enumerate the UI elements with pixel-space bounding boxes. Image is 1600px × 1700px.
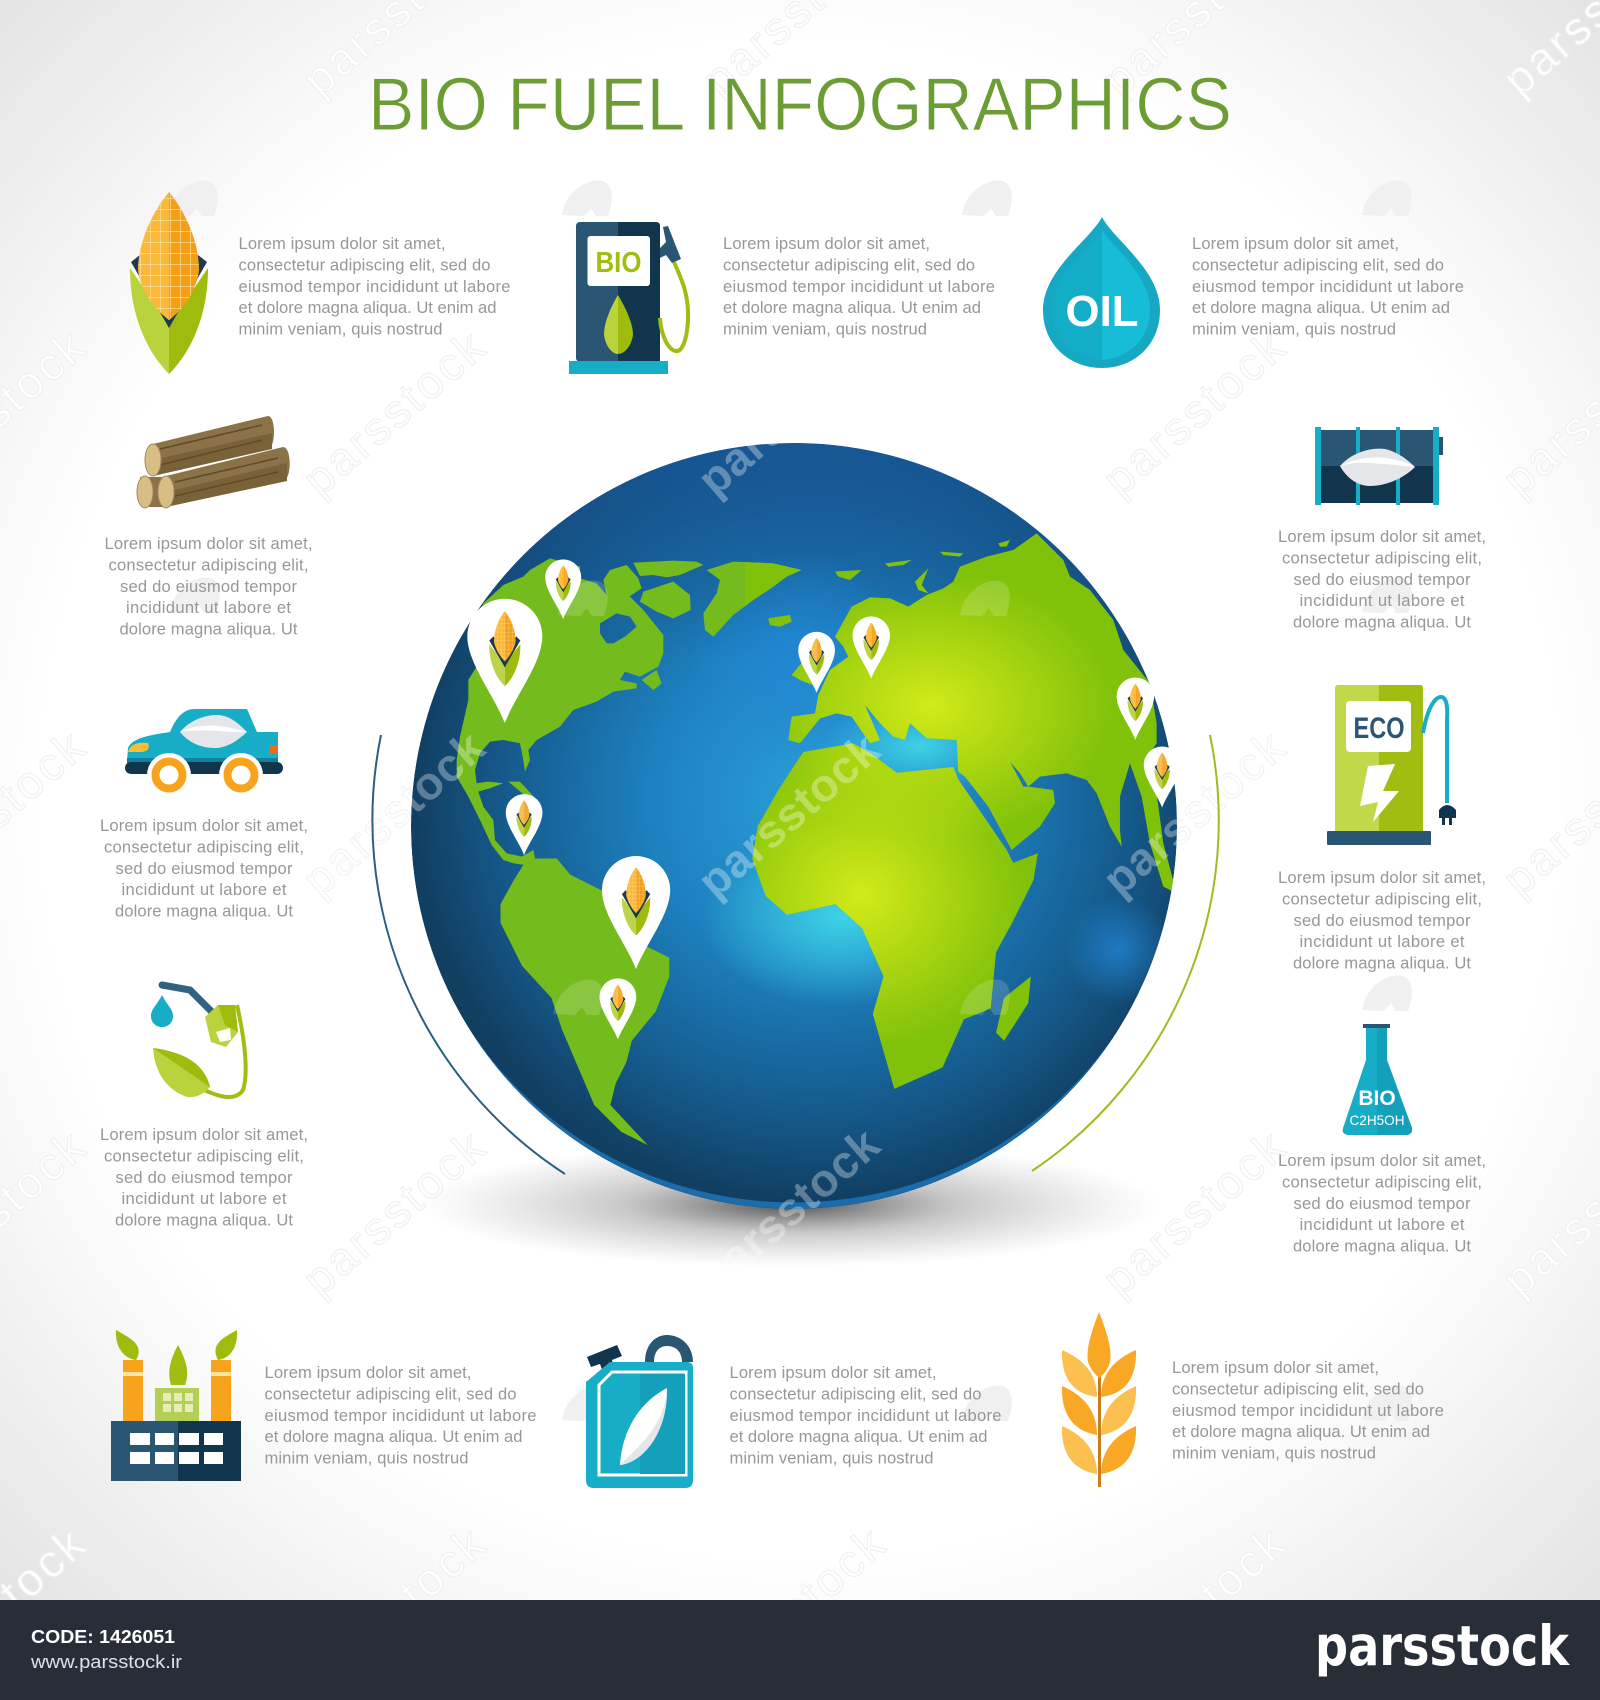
text: jerry can (730, 1363, 1002, 1468)
text: pump: minim veniam, quis nostrud (723, 320, 927, 339)
text: nozzle: incididunt ut labore et (122, 1189, 287, 1208)
text: nozzle (100, 1125, 308, 1230)
arc: left navy (372, 735, 565, 1174)
text: factory: Lorem ipsum dolor sit amet, (264, 1363, 472, 1382)
text: wheat: eiusmod tempor incididunt ut labore (1172, 1401, 1444, 1420)
text: jerry can: et dolore magna aliqua. Ut enim ad (730, 1427, 988, 1446)
arc: right green (1032, 735, 1219, 1171)
icon: jerry can (586, 1335, 693, 1488)
text: barrel: dolore magna aliqua. Ut (1293, 613, 1471, 632)
text: factory (264, 1363, 536, 1468)
text: logs: consectetur adipiscing elit, (108, 555, 308, 574)
text: corn (238, 234, 510, 339)
text: wheat: Lorem ipsum dolor sit amet, (1172, 1358, 1379, 1377)
footer url: www.parsstock.ir (30, 1652, 182, 1672)
watermark text on globe: parsstock (687, 320, 889, 506)
text: oil: Lorem ipsum dolor sit amet, (1192, 234, 1399, 253)
text: eco station: dolore magna aliqua. Ut (1293, 954, 1471, 973)
text: logs (104, 534, 312, 639)
text: barrel: incididunt ut labore et (1300, 591, 1465, 610)
text: car: sed do eiusmod tempor (116, 859, 293, 878)
text: eco station: consectetur adipiscing elit, (1282, 889, 1482, 908)
watermark text on background: parsstock (692, 1517, 895, 1700)
icon: eco charging station (1327, 685, 1456, 845)
text: logs: sed do eiusmod tempor (120, 577, 297, 596)
text: car: Lorem ipsum dolor sit amet, (100, 816, 308, 835)
text: oil: consectetur adipiscing elit, sed do (1192, 255, 1444, 274)
watermark elephant marks on globe (553, 581, 1010, 1015)
text: pump (723, 234, 995, 339)
text: jerry can: Lorem ipsum dolor sit amet, (730, 1363, 936, 1382)
watermark text on background: parsstock (292, 1120, 495, 1306)
watermark text on background: parsstock (1092, 1517, 1295, 1700)
icon: bio ethanol flask: C2H5OH (1350, 1112, 1404, 1128)
text: car (100, 816, 308, 921)
text: oil: et dolore magna aliqua. Ut enim ad (1192, 298, 1450, 317)
text: oil: eiusmod tempor incididunt ut labore (1192, 277, 1464, 296)
text: corn: eiusmod tempor incididunt ut labore (238, 277, 510, 296)
text: factory: et dolore magna aliqua. Ut enim ad (264, 1427, 522, 1446)
text: flask: dolore magna aliqua. Ut (1293, 1237, 1471, 1256)
watermark text on background: parsstock (1092, 720, 1295, 906)
text: factory: eiusmod tempor incididunt ut labore (264, 1406, 536, 1425)
icon: logs (137, 416, 290, 508)
text: nozzle: dolore magna aliqua. Ut (115, 1211, 293, 1230)
text: barrel: sed do eiusmod tempor (1294, 570, 1471, 589)
icon: biofuel barrel (1315, 427, 1443, 505)
text: wheat: consectetur adipiscing elit, sed do (1172, 1379, 1424, 1398)
text: eco station: incididunt ut labore et (1300, 932, 1465, 951)
text: corn: Lorem ipsum dolor sit amet, (238, 234, 446, 253)
world map continents (456, 533, 1174, 1145)
icon: fuel nozzle with leaf (151, 985, 246, 1097)
watermark text on background: parsstock (292, 1517, 495, 1700)
text: barrel: Lorem ipsum dolor sit amet, (1278, 527, 1486, 546)
text: pump: eiusmod tempor incididunt ut labore (723, 277, 995, 296)
text: wheat: et dolore magna aliqua. Ut enim ad (1172, 1422, 1430, 1441)
watermark text on background: parsstock (292, 720, 495, 906)
text: flask: incididunt ut labore et (1300, 1215, 1465, 1234)
text: flask: sed do eiusmod tempor (1294, 1194, 1471, 1213)
text: nozzle: sed do eiusmod tempor (116, 1168, 293, 1187)
text: oil: minim veniam, quis nostrud (1192, 320, 1396, 339)
globe (400, 430, 1185, 1230)
text: logs: incididunt ut labore et (126, 598, 291, 617)
watermark text on globe: parsstock (687, 722, 889, 908)
text: factory: minim veniam, quis nostrud (264, 1449, 468, 1468)
text: wheat: minim veniam, quis nostrud (1172, 1444, 1376, 1463)
icon: bio ethanol flask: BIO (1358, 1087, 1396, 1110)
text: nozzle: Lorem ipsum dolor sit amet, (100, 1125, 308, 1144)
text: car: incididunt ut labore et (122, 880, 287, 899)
watermark text on background: parsstock (292, 320, 495, 506)
text: eco station: Lorem ipsum dolor sit amet, (1278, 868, 1486, 887)
icon: bio fuel pump (569, 222, 688, 374)
text: flask (1278, 1151, 1486, 1256)
footer bar (0, 1600, 1600, 1700)
icon: oil drop (1043, 217, 1160, 368)
ground shadow under globe (420, 1143, 1160, 1267)
text: jerry can: minim veniam, quis nostrud (730, 1449, 934, 1468)
icon: bio fuel pump: BIO (596, 247, 642, 279)
text: car: consectetur adipiscing elit, (104, 837, 304, 856)
text: pump: Lorem ipsum dolor sit amet, (723, 234, 930, 253)
map pins (467, 559, 1180, 1039)
text: jerry can: consectetur adipiscing elit, sed do (730, 1384, 982, 1403)
icon: corn (130, 192, 208, 374)
watermark text on globe: parsstock (1092, 720, 1294, 906)
watermark text on globe: parsstock (292, 720, 494, 906)
text: logs: dolore magna aliqua. Ut (120, 620, 298, 639)
icon: oil drop: OIL (1066, 287, 1138, 336)
text: logs: Lorem ipsum dolor sit amet, (104, 534, 312, 553)
text: car: dolore magna aliqua. Ut (115, 902, 293, 921)
globe ocean (411, 443, 1177, 1209)
text: corn: consectetur adipiscing elit, sed do (238, 255, 490, 274)
text: pump: et dolore magna aliqua. Ut enim ad (723, 298, 981, 317)
icon: wheat (1062, 1312, 1136, 1487)
text: corn: minim veniam, quis nostrud (238, 320, 442, 339)
watermark text on globe: parsstock (687, 1117, 889, 1303)
text: factory: consectetur adipiscing elit, sed do (264, 1384, 516, 1403)
text: barrel: consectetur adipiscing elit, (1282, 548, 1482, 567)
text: corn: et dolore magna aliqua. Ut enim ad (238, 298, 496, 317)
icon: bio factory (111, 1330, 241, 1481)
watermark text on background: parsstock (1092, 320, 1295, 506)
text: oil (1192, 234, 1464, 339)
text: jerry can: eiusmod tempor incididunt ut labore (730, 1406, 1002, 1425)
text: flask: Lorem ipsum dolor sit amet, (1278, 1151, 1486, 1170)
watermark elephant marks (168, 181, 1412, 1421)
watermark text on background: parsstock (1092, 1120, 1295, 1306)
footer code: CODE: 1426051 (31, 1627, 175, 1647)
icon: eco car (125, 709, 283, 797)
icon: bio ethanol flask (1343, 1024, 1412, 1135)
text: barrel (1278, 527, 1486, 632)
title: BIO FUEL INFOGRAPHICS (368, 62, 1232, 146)
text: nozzle: consectetur adipiscing elit, (104, 1146, 304, 1165)
text: eco station: sed do eiusmod tempor (1294, 911, 1471, 930)
text: pump: consectetur adipiscing elit, sed do (723, 255, 975, 274)
icon: eco charging station: ECO (1354, 712, 1404, 745)
watermark text on globe (292, 320, 1294, 1303)
text: eco station (1278, 868, 1486, 973)
text: flask: consectetur adipiscing elit, (1282, 1172, 1482, 1191)
text: wheat (1172, 1358, 1444, 1463)
